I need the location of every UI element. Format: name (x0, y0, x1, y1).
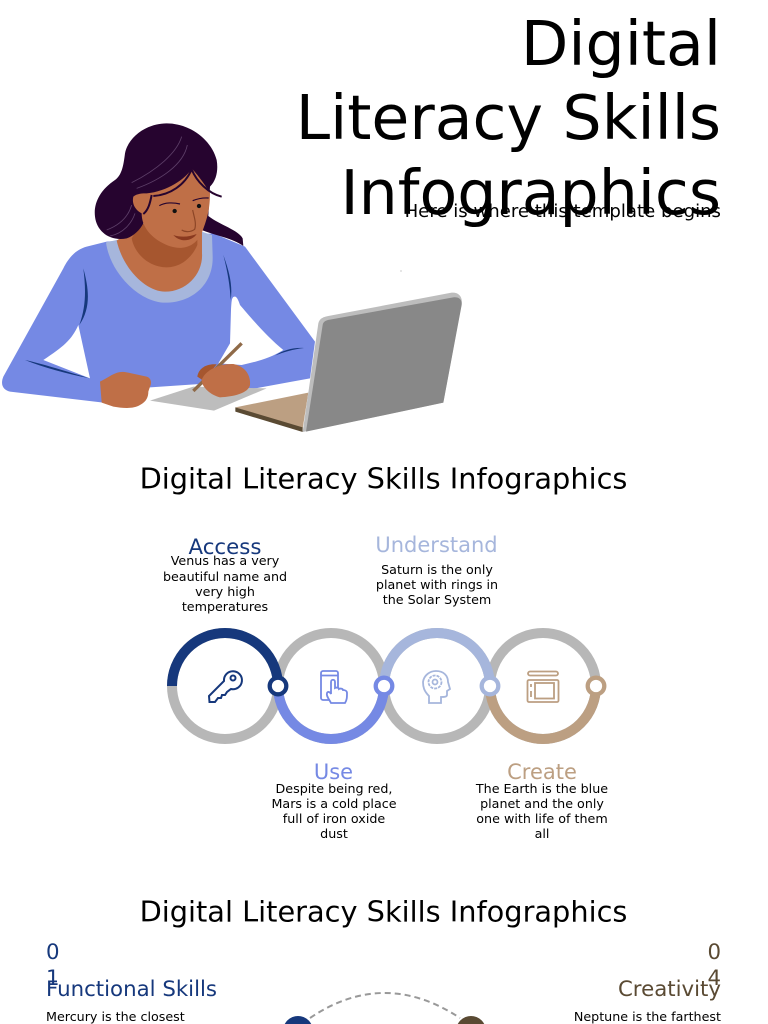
label: Create: all (535, 826, 549, 841)
label: Create: The Earth is the blue (475, 781, 608, 796)
node 3 (482, 678, 498, 694)
node 2 (376, 678, 392, 694)
text: Neptune: Neptune is the farthest (574, 1009, 721, 1024)
right hand (202, 364, 250, 397)
arc: Access (172, 633, 278, 686)
finger shadow (197, 364, 217, 381)
label: Use: dust (320, 826, 348, 841)
neck (117, 230, 202, 292)
label: Access: beautiful name and (163, 569, 287, 584)
subtitle: Here is where this template begins (405, 201, 721, 222)
laptop base (235, 393, 308, 428)
arc: Understand (384, 633, 490, 686)
pencil (193, 343, 242, 391)
left fist (100, 372, 151, 408)
title: Digital (521, 8, 721, 80)
dashed arc (310, 993, 460, 1018)
text: Mercury: Mercury is the closest (46, 1009, 185, 1024)
neck shadow (132, 223, 197, 267)
section heading 2: Digital Literacy Skills Infographics (140, 894, 627, 928)
arm gaps (43, 297, 283, 378)
label: Understand (375, 533, 498, 607)
label: Use: Despite being red, (276, 781, 392, 796)
label: Understand: the Solar System (383, 592, 491, 607)
paper (150, 387, 267, 411)
label: Create: Create (507, 760, 577, 784)
label: Create (475, 760, 608, 841)
shirt folds (25, 255, 304, 378)
label: Understand: Understand (375, 533, 498, 557)
eyes and brows (172, 209, 177, 213)
number 01: 0 (46, 940, 60, 965)
label: Access (163, 535, 287, 614)
collar (106, 232, 213, 303)
laptop edge (235, 407, 303, 432)
nose (182, 210, 195, 232)
icon: drawing tablet (528, 672, 558, 702)
label: Understand: planet with rings in (376, 577, 498, 592)
node: functional skills (283, 1016, 313, 1024)
gray rings (172, 633, 596, 739)
label: Create: one with life of them (476, 811, 608, 826)
hair (95, 123, 243, 246)
title: Infographics (340, 157, 721, 229)
label: Access: very high (195, 584, 255, 599)
laptop rim (303, 293, 462, 432)
title: Literacy Skills (296, 82, 721, 154)
section heading 1: Digital Literacy Skills Infographics (140, 462, 627, 496)
arc: Create (490, 686, 596, 739)
speck (400, 270, 402, 272)
label: Access: Venus has a very (171, 553, 280, 568)
number 04: 4 (707, 966, 721, 991)
label: Use: Use (314, 760, 353, 784)
laptop lid (306, 297, 462, 432)
icon: head with gear (423, 671, 450, 703)
number 04: 0 (707, 940, 721, 965)
icon: phone with hand (321, 671, 347, 703)
hair strands (143, 169, 222, 214)
label: Use: full of iron oxide (283, 811, 385, 826)
label: Access: Access (189, 535, 261, 560)
label: Use (271, 760, 397, 841)
heading: Creativity: Creativity (618, 977, 721, 1002)
ring chain (172, 633, 604, 739)
icon: key (209, 671, 242, 702)
label: Use: Mars is a cold place (271, 796, 397, 811)
number 01: 1 (46, 966, 60, 991)
label: Create: planet and the only (480, 796, 604, 811)
heading: Functional Skills: Functional Skills (46, 977, 217, 1002)
node 1 (270, 678, 286, 694)
node: creativity (456, 1016, 486, 1024)
arc: Use (278, 686, 384, 739)
illustration: woman at laptop (2, 123, 462, 432)
label: Understand: Saturn is the only (381, 562, 493, 577)
node 4 (588, 678, 604, 694)
shirt (2, 233, 315, 403)
face (133, 168, 210, 248)
mouth (173, 234, 197, 240)
label: Access: temperatures (182, 599, 268, 614)
